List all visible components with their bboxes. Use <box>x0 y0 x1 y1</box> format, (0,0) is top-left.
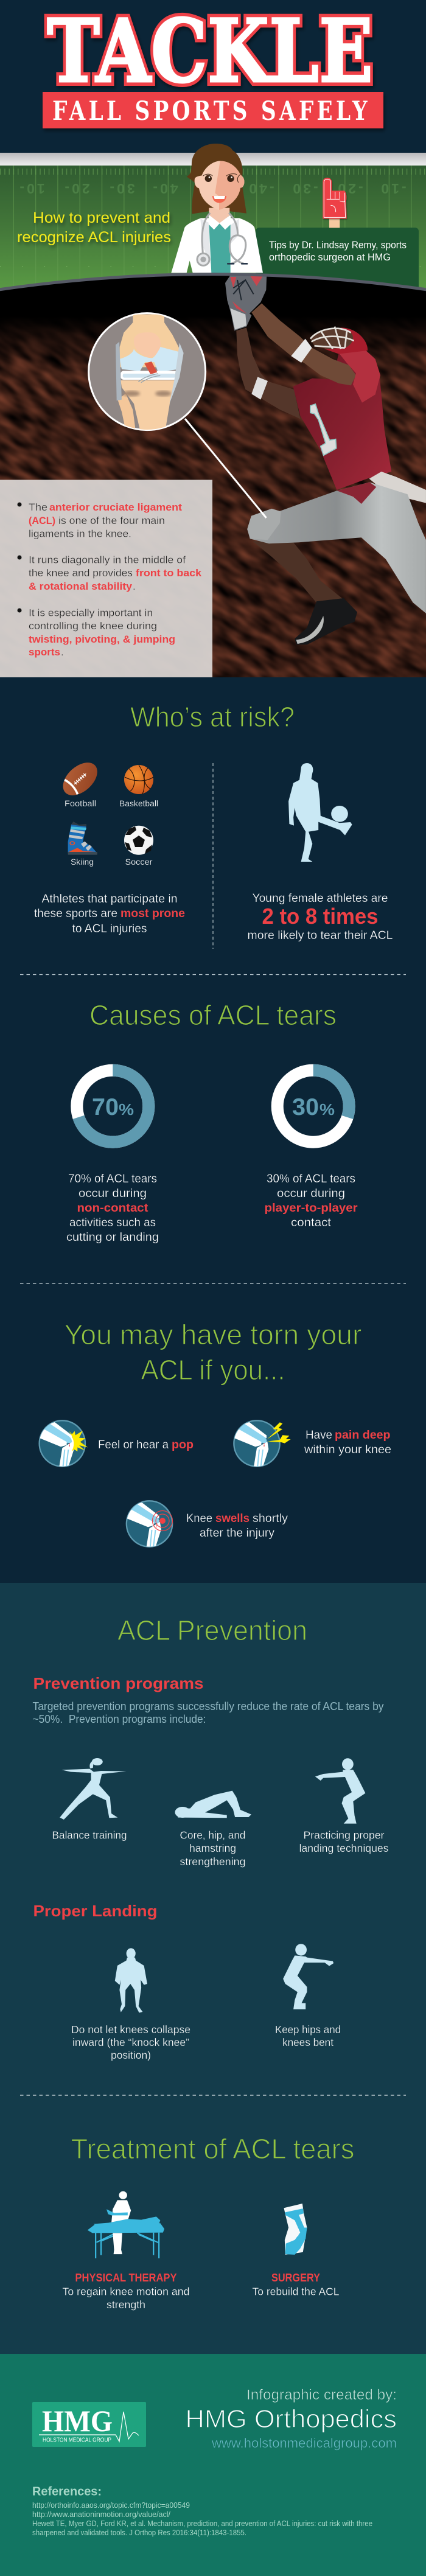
doctor hair <box>187 144 246 214</box>
text: young female athletes stat <box>247 892 393 942</box>
text: credit: Infographic created by: <box>246 2387 397 2403</box>
text block: ACL facts: controlling the knee during <box>29 621 157 632</box>
text panel translucent <box>0 480 212 678</box>
icon: bridge pose <box>175 1791 251 1818</box>
panel: football field header: -10 <box>379 181 407 197</box>
text: sports prone: Athletes that participate in <box>41 893 178 906</box>
heading: Who's at risk: Who’s at risk? <box>130 701 295 733</box>
subtitle banner: FALL SPORTS SAFELY <box>52 96 368 127</box>
text: swelling: swells <box>215 1512 250 1525</box>
chart: 30 percent donut: % <box>320 1100 335 1119</box>
doctor face <box>195 161 244 210</box>
text: deep pain: pain deep <box>335 1429 391 1442</box>
icon: knee deep pain <box>234 1420 291 1467</box>
text: prevention intro: Targeted prevention programs successfully reduce the rate of ACL tears by <box>33 1700 384 1712</box>
icon: physical therapy table <box>88 2191 164 2258</box>
panel: football field header: 10- <box>17 181 45 197</box>
text: credit: HMG Orthopedics <box>185 2404 397 2433</box>
player left arm <box>236 327 300 419</box>
heading: symptoms: You may have torn your <box>65 1319 361 1350</box>
player right arm <box>251 303 356 385</box>
text block: ACL facts: ligaments in the knee. <box>29 528 131 539</box>
header tagline <box>17 209 171 246</box>
text block: ACL facts: is one of the four main <box>58 515 165 526</box>
chart: 70 percent donut <box>77 1070 148 1142</box>
panel: football field header <box>0 153 426 293</box>
text: swelling <box>186 1512 288 1540</box>
doctor coat <box>171 218 263 273</box>
text: pop: Feel or hear a <box>98 1439 169 1451</box>
label: Skiing: Skiing <box>71 857 94 867</box>
text: 70 percent explanation <box>66 1173 159 1244</box>
panel: football field header: 40- <box>150 181 178 197</box>
jersey number <box>310 404 337 455</box>
text block: ACL facts: & rotational stability <box>29 581 133 592</box>
text: references: sharpened and validated tools. J Orthop Res 2016:34(11):1843-1855. <box>32 2529 246 2537</box>
text: 70 percent explanation: cutting or landing <box>66 1231 159 1244</box>
text: physical therapy: PHYSICAL THERAPY <box>75 2272 176 2284</box>
logo: HMG: HMG <box>42 2404 113 2438</box>
text: physical therapy <box>62 2272 190 2311</box>
text: pop: pop <box>172 1439 194 1451</box>
label: bent knees: Keep hips and <box>275 2023 341 2036</box>
subheading: proper landing: Proper Landing <box>33 1902 157 1920</box>
icon: football <box>57 756 103 801</box>
icon: foam finger <box>323 178 347 228</box>
text block: ACL facts: the knee and provides <box>29 568 133 579</box>
icon: knee anatomy magnifier <box>89 313 206 430</box>
header tagline: How to prevent and <box>33 209 170 226</box>
label: Football: Football <box>65 798 96 808</box>
icon: balance pose <box>60 1758 127 1820</box>
icon: bent knees figure <box>283 1944 333 2009</box>
column divider <box>212 763 214 949</box>
text: deep pain: Have <box>306 1429 332 1442</box>
arc divider <box>0 274 426 290</box>
heading: symptoms <box>65 1319 361 1386</box>
label: landing: Practicing proper <box>303 1829 385 1841</box>
subheading: prevention programs: Prevention programs <box>33 1674 203 1692</box>
tips box: Tips by Dr. Lindsay Remy, sports <box>269 239 407 251</box>
label: core: hamstring <box>189 1842 236 1854</box>
text: 70 percent explanation: 70% of ACL tears <box>68 1173 157 1185</box>
label: landing: landing techniques <box>299 1842 389 1854</box>
panel: football field header: 20- <box>62 181 90 197</box>
text: 30 percent explanation: contact <box>291 1216 332 1229</box>
text: references <box>32 2485 372 2537</box>
text: surgery: SURGERY <box>271 2272 320 2284</box>
icon: knee swelling <box>127 1501 173 1547</box>
label: core: Core, hip, and <box>180 1829 246 1841</box>
icon: knock knee figure <box>115 1948 147 2012</box>
text: swelling: shortly <box>253 1512 288 1525</box>
text: young female athletes stat: Young female athletes are <box>252 892 388 905</box>
label: core: strengthening <box>180 1855 246 1868</box>
label: knock knee: position) <box>111 2049 151 2061</box>
panel: action photo background <box>0 276 426 677</box>
label: knock knee <box>71 2023 190 2061</box>
panel: football field header: -30 <box>290 181 318 197</box>
doctor shirt <box>209 223 231 273</box>
panel: football field header: -20 <box>335 181 363 197</box>
text: prevention intro: ~50%. Prevention programs include: <box>33 1712 206 1725</box>
label: Basketball: Basketball <box>119 798 158 808</box>
text: credit: www.holstonmedicalgroup.com <box>211 2435 397 2451</box>
text: surgery: To rebuild the ACL <box>252 2286 340 2298</box>
text block: ACL facts: front to back <box>136 568 202 579</box>
icon: basketball <box>124 765 153 794</box>
panel: prevention and treatment <box>0 1583 426 2354</box>
text block: ACL facts: anterior cruciate ligament <box>49 502 183 513</box>
panel: footer <box>0 2354 426 2576</box>
chart: 30 percent donut <box>278 1070 349 1142</box>
helmet <box>324 327 368 354</box>
text: sports prone <box>34 893 185 935</box>
text: prevention intro <box>33 1700 384 1725</box>
text block: ACL facts: The <box>29 502 47 513</box>
label: knock knee: Do not let knees collapse <box>71 2023 190 2036</box>
text block: ACL facts: (ACL) <box>29 515 55 526</box>
text: sports prone: most prone <box>120 907 185 920</box>
player jersey <box>293 348 391 490</box>
text: physical therapy: To regain knee motion and <box>62 2286 190 2298</box>
chart: 30 percent donut: 30 <box>292 1094 319 1120</box>
doctor neck <box>209 208 229 223</box>
cleat <box>295 598 357 644</box>
icon: knee brace <box>284 2204 307 2255</box>
text: deep pain <box>304 1429 391 1456</box>
label: knock knee: inward (the “knock knee” <box>72 2036 189 2048</box>
text: 70 percent explanation: occur during <box>79 1187 147 1200</box>
icon: squat pose <box>315 1758 365 1824</box>
text: references: References: <box>32 2485 102 2499</box>
text: 70 percent explanation: activities such as <box>69 1216 156 1229</box>
text: credit <box>185 2387 397 2451</box>
heading: prevention: ACL Prevention <box>117 1614 307 1646</box>
text: young female athletes stat: more likely to tear their ACL <box>247 929 393 942</box>
logo: HMG <box>32 2402 146 2447</box>
text block: ACL facts: It is especially important in <box>29 607 153 618</box>
gloves <box>225 274 267 330</box>
label: core <box>180 1829 246 1868</box>
label: Soccer: Soccer <box>125 857 153 867</box>
page background <box>0 0 426 1583</box>
text: 30 percent explanation <box>264 1173 358 1229</box>
text: sports prone: these sports are <box>34 907 117 920</box>
panel: football field header: -40 <box>246 181 274 197</box>
tips box: orthopedic surgeon at HMG <box>269 251 391 263</box>
text: 70 percent explanation: non-contact <box>77 1202 148 1215</box>
label: landing <box>299 1829 389 1854</box>
icon: ski boot <box>68 822 97 855</box>
towel <box>369 472 426 503</box>
logo: HMG: HOLSTON MEDICAL GROUP <box>43 2437 111 2444</box>
icon: female athlete silhouette <box>288 763 352 862</box>
text: sports prone: to ACL injuries <box>72 923 147 935</box>
text: swelling: Knee <box>186 1512 212 1525</box>
callout line <box>185 419 267 518</box>
heading: treatment: Treatment of ACL tears <box>71 2133 354 2165</box>
stethoscope <box>197 213 246 265</box>
text: 30 percent explanation: 30% of ACL tears <box>267 1173 355 1185</box>
text block: ACL facts: . <box>61 647 64 658</box>
text: references: http://orthoinfo.aaos.org/topic.cfm?topic=a00549 <box>32 2501 190 2510</box>
text: references: http://www.anationinmotion.org/value/acl/ <box>32 2510 171 2519</box>
header tagline: recognize ACL injuries <box>17 229 171 246</box>
heading: causes: Causes of ACL tears <box>89 999 337 1031</box>
label: balance: Balance training <box>52 1829 127 1841</box>
icon: soccer ball <box>124 826 153 855</box>
text: swelling: after the injury <box>200 1527 274 1540</box>
text: deep pain: within your knee <box>304 1443 391 1456</box>
text: 30 percent explanation: occur during <box>277 1187 345 1200</box>
tips box <box>256 228 419 301</box>
text block: ACL facts: sports <box>29 647 60 658</box>
chart: 70 percent donut: 70 <box>92 1094 119 1120</box>
text: references: Hewett TE, Myer GD, Ford KR, et al. Mechanism, prediction, and prevention of ACL injuries: cut risk with three <box>32 2519 372 2528</box>
heading: symptoms: ACL if you... <box>141 1354 285 1386</box>
text: surgery <box>252 2272 340 2298</box>
player lower leg <box>253 541 343 604</box>
label: bent knees <box>275 2023 341 2048</box>
text block: ACL facts <box>17 502 202 658</box>
panel: football field header: 30- <box>107 181 135 197</box>
label: bent knees: knees bent <box>282 2036 333 2048</box>
text block: ACL facts: It runs diagonally in the middle of <box>29 555 186 566</box>
text: young female athletes stat: 2 to 8 times <box>262 904 379 929</box>
text block: ACL facts: . <box>133 581 136 592</box>
icon: knee pop <box>40 1420 88 1467</box>
text block: ACL facts: twisting, pivoting, & jumping <box>29 634 175 645</box>
photo: football player <box>225 274 426 644</box>
chart: 70 percent donut: % <box>119 1100 134 1119</box>
player pants <box>247 482 426 613</box>
text: 30 percent explanation: player-to-player <box>264 1202 358 1215</box>
doctor illustration <box>171 144 263 273</box>
text: physical therapy: strength <box>106 2299 145 2311</box>
